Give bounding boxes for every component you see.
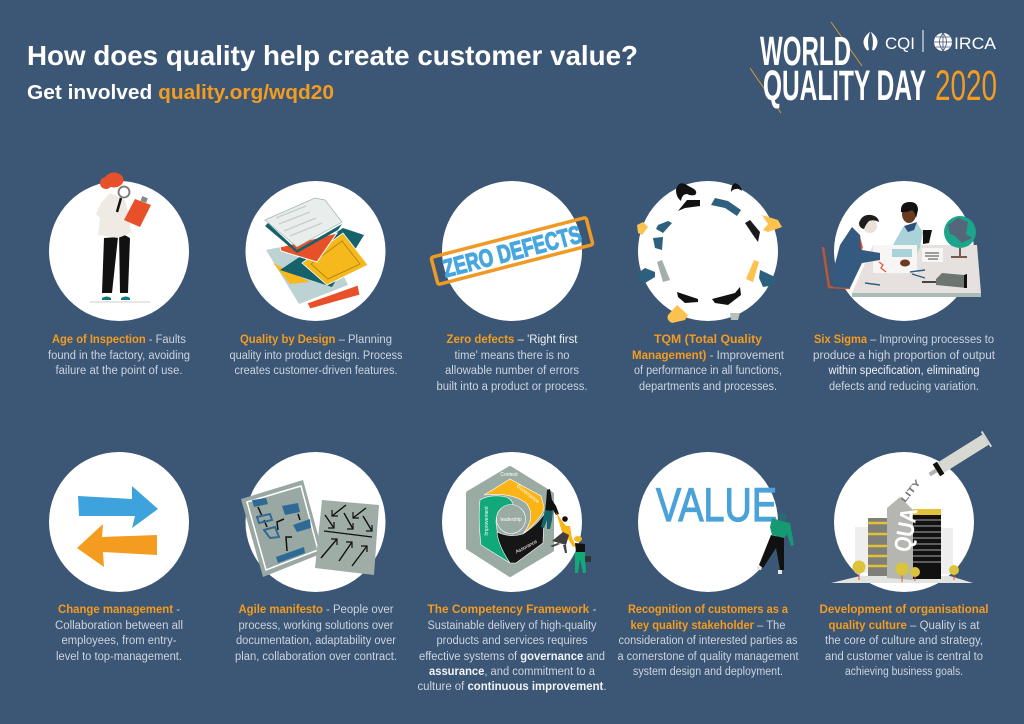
icon: syringe [925,431,992,482]
text: six sigma: defects and reducing variation. [829,381,979,393]
text: six sigma: Six Sigma – Improving processes to [814,334,994,346]
icon: competency hexagon: Assurance [515,539,539,555]
icon: competency hexagon: Context [500,472,518,478]
panel: zero defects [431,181,593,393]
text: customers as stakeholder: key quality stakeholder – The [630,620,786,632]
text: quality by design [230,334,403,377]
panel: six sigma [813,181,996,393]
text: TQM: TQM (Total Quality [654,334,763,346]
icon: flowchart sheet [241,480,323,577]
icon: city of quality [831,478,973,583]
text: organisational culture [820,604,988,678]
icon: city of quality: QUA [889,506,924,554]
text: change management [55,604,183,663]
panel: agile manifesto [235,452,397,663]
text: TQM: Management) - Improvement [632,350,785,362]
text: competency framework: Sustainable delivery of high-quality [428,620,597,632]
text: change management: level to top-management. [56,651,182,663]
text: TQM: departments and processes. [639,381,777,393]
text: six sigma [813,334,996,393]
text: agile manifesto: Agile manifesto - People over [238,604,394,616]
panel: organisational culture [820,431,992,678]
text: zero defects [436,334,588,393]
text: agile manifesto [235,604,397,663]
text: change management: employees, from entry- [62,635,177,647]
icon: stack of books [265,198,368,309]
text: quality by design: Quality by Design – Planning [240,334,392,346]
panel: TQM [632,181,785,393]
text: zero defects: Zero defects – 'Right first [446,334,578,346]
text: age of inspection: Age of Inspection - Faults [52,334,186,346]
text: customers as stakeholder: a cornerstone of quality management [618,651,799,663]
text: agile manifesto: documentation, adaptability over [236,635,396,647]
icon: value lettering: VALUE [656,478,777,531]
text: age of inspection: found in the factory, avoiding [48,350,190,362]
icon: inspector with magnifier [90,172,151,302]
icon: competency hexagon: Improvement [484,506,490,536]
icon: arrows sheet [315,500,379,575]
panel: competency framework [418,452,606,693]
logo: World Quality Day 2020 [750,22,997,113]
icon: blue arrow right [78,486,158,528]
subtitle with link: Get involved quality.org/wqd20 [27,82,334,104]
text: competency framework: effective systems of governance and [419,651,605,663]
text: customers as stakeholder: system design and deployment. [633,666,783,678]
text: six sigma: within specification, eliminating [828,365,980,377]
text: TQM: of performance in all functions, [634,365,782,377]
panel: change management [49,452,189,663]
text: TQM [632,334,785,393]
title: How does quality help create customer value? [27,40,638,71]
text: age of inspection: failure at the point of use. [56,365,182,377]
icon: orange arrow left [77,524,157,567]
icon: competency hexagon [468,468,552,575]
text: quality by design: creates customer-driven features. [234,365,398,377]
text: six sigma: produce a high proportion of output [813,350,996,362]
text: zero defects: built into a product or process. [436,381,588,393]
text: competency framework: culture of continuous improvement. [418,681,606,693]
text: customers as stakeholder: Recognition of customers as a [628,604,789,616]
text: agile manifesto: plan, collaboration over contract. [235,651,397,663]
panel: customers as stakeholder [618,452,799,678]
text: change management: Change management - [58,604,180,616]
text: organisational culture: Development of organisational [820,604,988,616]
panel: quality by design [230,181,403,377]
text: zero defects: time' means there is no [454,350,570,362]
text: competency framework [418,604,606,693]
text: competency framework: products and services requires [436,635,588,647]
text: age of inspection [48,334,190,377]
icon: zero defects stamp [431,217,593,286]
text: organisational culture: achieving business goals. [845,666,963,678]
icon: zero defects stamp: ZERO DEFECTS [440,221,584,283]
icon: climbing figures [541,489,591,573]
text: organisational culture: and customer value is central to [825,651,983,663]
icon: figure painting [757,513,794,574]
icon: city of quality: LITY [899,478,923,504]
text: agile manifesto: process, working solutions over [238,620,394,632]
logo: World Quality Day 2020: CQI [885,34,915,53]
logo: World Quality Day 2020: WORLD [760,28,851,74]
text: competency framework: assurance, and commitment to a [429,666,596,678]
text: change management: Collaboration between all [55,620,183,632]
text: customers as stakeholder: consideration of interested parties as [618,635,798,647]
text: competency framework: The Competency Framework - [428,604,597,616]
logo: World Quality Day 2020: IRCA [954,34,997,53]
panel: age of inspection [48,172,190,377]
icon: competency hexagon: leadership [500,517,522,523]
text: organisational culture: the core of culture and strategy, [825,635,983,647]
icon: two men at a desk [823,202,981,297]
text: customers as stakeholder [618,604,799,678]
text: organisational culture: quality culture – Quality is at [828,620,980,632]
icon: competency hexagon: Governance [515,483,540,505]
text: quality by design: quality into product design. Process [230,350,403,362]
text: zero defects: allowable number of errors [445,365,579,377]
icon: people around a table [637,183,782,323]
